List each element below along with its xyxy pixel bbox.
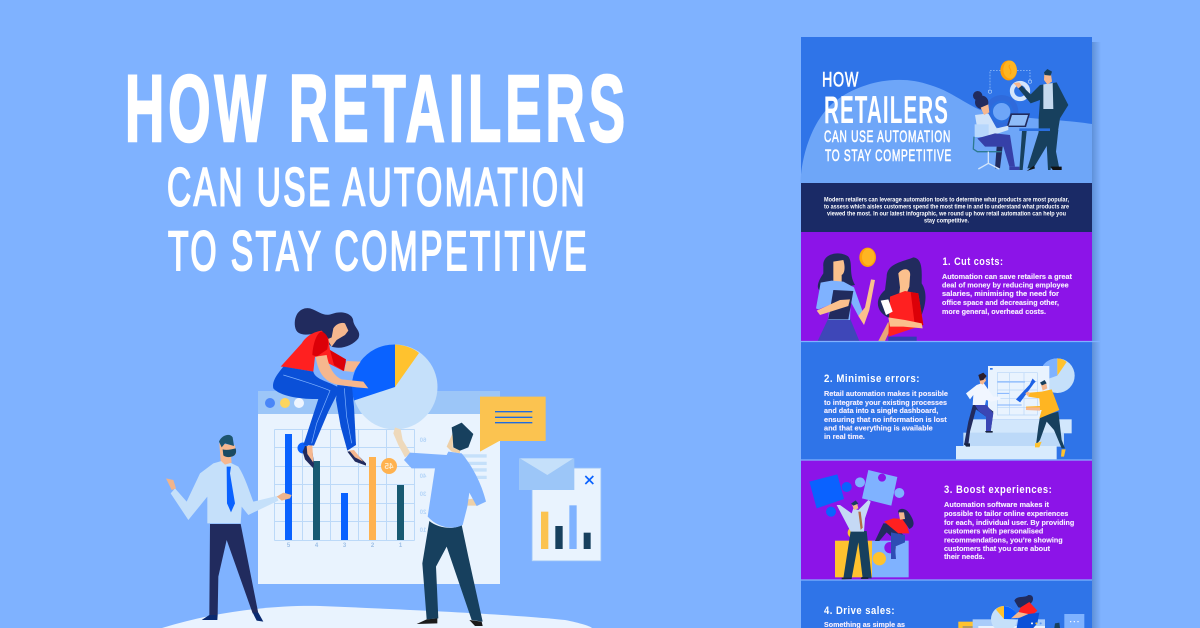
dashboard chart panel: 30 (419, 492, 426, 498)
dashboard chart panel: 1 (399, 543, 403, 549)
illustration: dashboard repair (956, 358, 1075, 459)
intro text: Modern retailers can leverage automation tools to determine what products are most popular, (824, 196, 1069, 204)
header illustration: woman at desk, businessman, coin and gears (973, 60, 1068, 171)
dashboard chart panel: 45 (384, 462, 393, 471)
body text: and data into a single dashboard, (824, 406, 938, 415)
body text: their needs. (944, 552, 985, 561)
dashboard chart panel: 2 (371, 543, 375, 549)
section 2: minimise errors (801, 342, 1092, 460)
intro text: viewed the most. In our latest infographic, we round up how retail automation can help you (827, 210, 1066, 218)
small bar chart card with envelope (519, 458, 601, 561)
body text: customers that you care about (944, 544, 1050, 553)
man pointing at chart (166, 435, 292, 622)
dashboard chart panel: 4 (315, 543, 319, 549)
body text: Automation software makes it (944, 500, 1049, 509)
header title: HOW (822, 68, 859, 92)
main title: HOW RETAILERS (125, 56, 629, 162)
dashboard chart panel: 5 (287, 543, 291, 549)
body text: deal of money by reducing employee (942, 281, 1069, 290)
body text: Retail automation makes it possible (824, 389, 948, 398)
main title: CAN USE AUTOMATION (167, 158, 587, 218)
header title (822, 68, 952, 165)
body text: more general, overhead costs. (942, 307, 1046, 316)
main title: TO STAY COMPETITIVE (168, 219, 589, 282)
body text (944, 500, 1075, 561)
heading: 3. Boost experiences: (944, 484, 1052, 496)
pie chart (352, 344, 438, 430)
section 3: boost experiences (801, 460, 1092, 580)
ground (162, 606, 592, 628)
header title: TO STAY COMPETITIVE (825, 146, 952, 165)
dashboard chart panel: 40 (419, 474, 426, 480)
heading: 2. Minimise errors: (824, 373, 920, 385)
main illustration: dashboard and people (162, 308, 601, 628)
heading: 4. Drive sales: (824, 605, 895, 617)
header panel (800, 37, 1092, 183)
section 1: cut costs (801, 232, 1092, 342)
dashboard chart panel: 60 (419, 438, 426, 444)
body text: Automation can save retailers a great (942, 272, 1072, 281)
infographic preview (800, 37, 1100, 628)
body text: for each, individual user. By providing (944, 518, 1075, 527)
infographic preview shadow (1092, 42, 1101, 628)
body text (824, 389, 948, 441)
illustration: two women with coin (816, 248, 926, 341)
man reaching for pie chart (393, 423, 486, 626)
body text: possible to tailor online experiences (944, 509, 1068, 518)
intro band (801, 183, 1092, 232)
illustration: woman on dashboard (958, 595, 1084, 628)
heading: 1. Cut costs: (942, 256, 1004, 268)
intro text (824, 196, 1069, 224)
dashboard chart panel: 10 (419, 528, 426, 534)
section 4: drive sales (801, 580, 1092, 628)
dashboard chart panel: 3 (343, 543, 347, 549)
dashboard chart panel: 20 (419, 510, 426, 516)
intro text: stay competitive. (924, 218, 969, 224)
intro text: to assess which aisles customers spend the most time in and to understand what products are (824, 204, 1069, 210)
woman sitting on dashboard (273, 308, 368, 468)
header title: RETAILERS (824, 89, 949, 132)
header title: CAN USE AUTOMATION (824, 127, 951, 146)
body text: recommendations, you’re showing (944, 535, 1063, 544)
body text: ensuring that no information is lost (824, 415, 947, 424)
body text: to integrate your existing processes (824, 398, 947, 407)
main title (125, 56, 629, 282)
body text: salaries, minimising the need for (942, 289, 1059, 298)
body text (942, 272, 1072, 316)
body text: in real time. (824, 432, 865, 441)
body text: office space and decreasing other, (942, 298, 1059, 307)
body text: customers with personalised (944, 527, 1044, 536)
speech bubble (480, 397, 546, 452)
body text: and that everything is available (824, 423, 933, 432)
dashboard chart panel (258, 391, 500, 584)
illustration: puzzle pieces (809, 470, 914, 580)
